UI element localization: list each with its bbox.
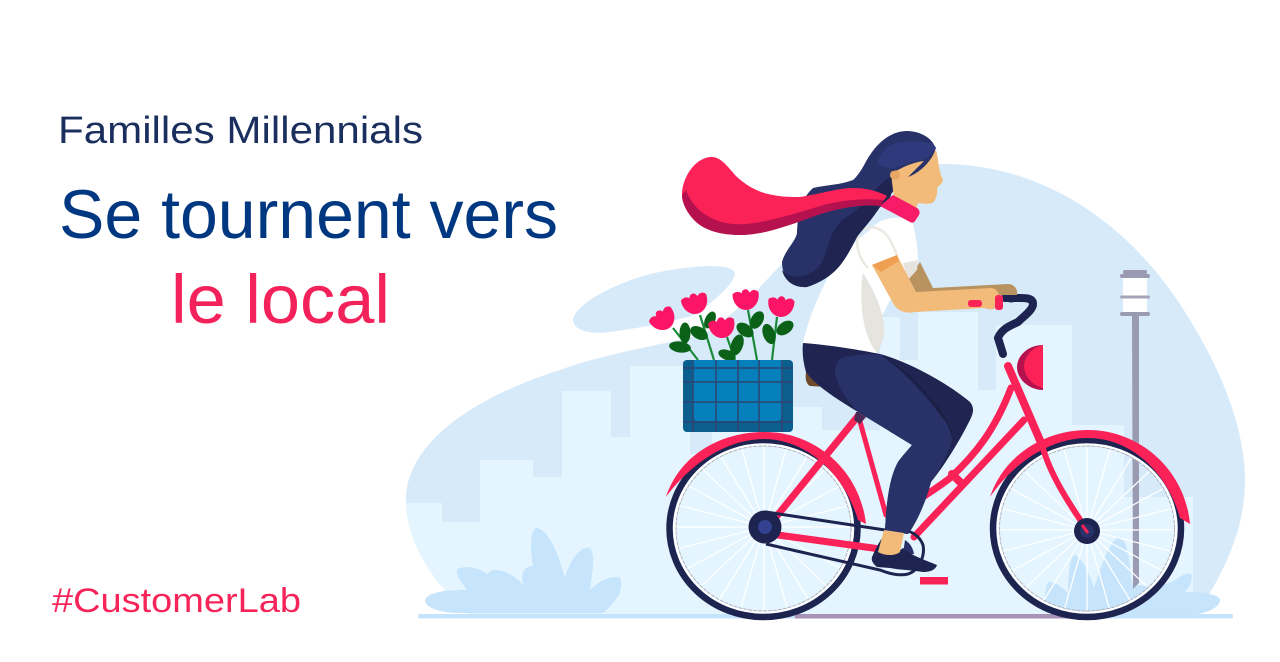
seat [806,372,827,387]
rear wheel [670,440,858,617]
icon: woman cyclist [682,131,1017,572]
near arm [872,255,999,313]
backpack strap [857,227,918,353]
illustration: city background [400,164,1245,620]
icon: left bush [425,528,621,613]
title accent: le local: le local [171,261,390,338]
ear [890,170,900,180]
front hub [1074,518,1100,544]
icon: basket [683,360,793,432]
rear fender [666,432,866,524]
hashtag: CustomerLab: #CustomerLab [52,582,301,620]
ankle [878,530,904,555]
hair back [782,131,935,287]
front fender [990,430,1190,524]
handlebar [998,292,1033,354]
heading: Familles Millennials: Familles Millennials [58,110,423,152]
handle grips [968,295,1003,310]
icon: bicycle [666,292,1190,617]
torso [803,218,918,353]
rear hub [748,510,782,544]
title: Se tournent vers: Se tournent vers [59,176,558,253]
hair shade [782,176,892,287]
icon: right bush [1044,537,1220,615]
frame [772,366,1087,549]
hair front [877,142,936,177]
face [892,150,943,215]
shoe [872,538,937,572]
headlight [1017,345,1043,390]
pedal [920,577,948,584]
front wheel [993,440,1181,617]
scarf tail [682,157,887,235]
leg [803,343,973,534]
far arm [908,262,1017,296]
ground line [418,614,1233,618]
icon: street lamp [1120,270,1150,589]
scarf collar [880,195,920,223]
icon: flowers [647,288,796,363]
chain [766,512,923,575]
